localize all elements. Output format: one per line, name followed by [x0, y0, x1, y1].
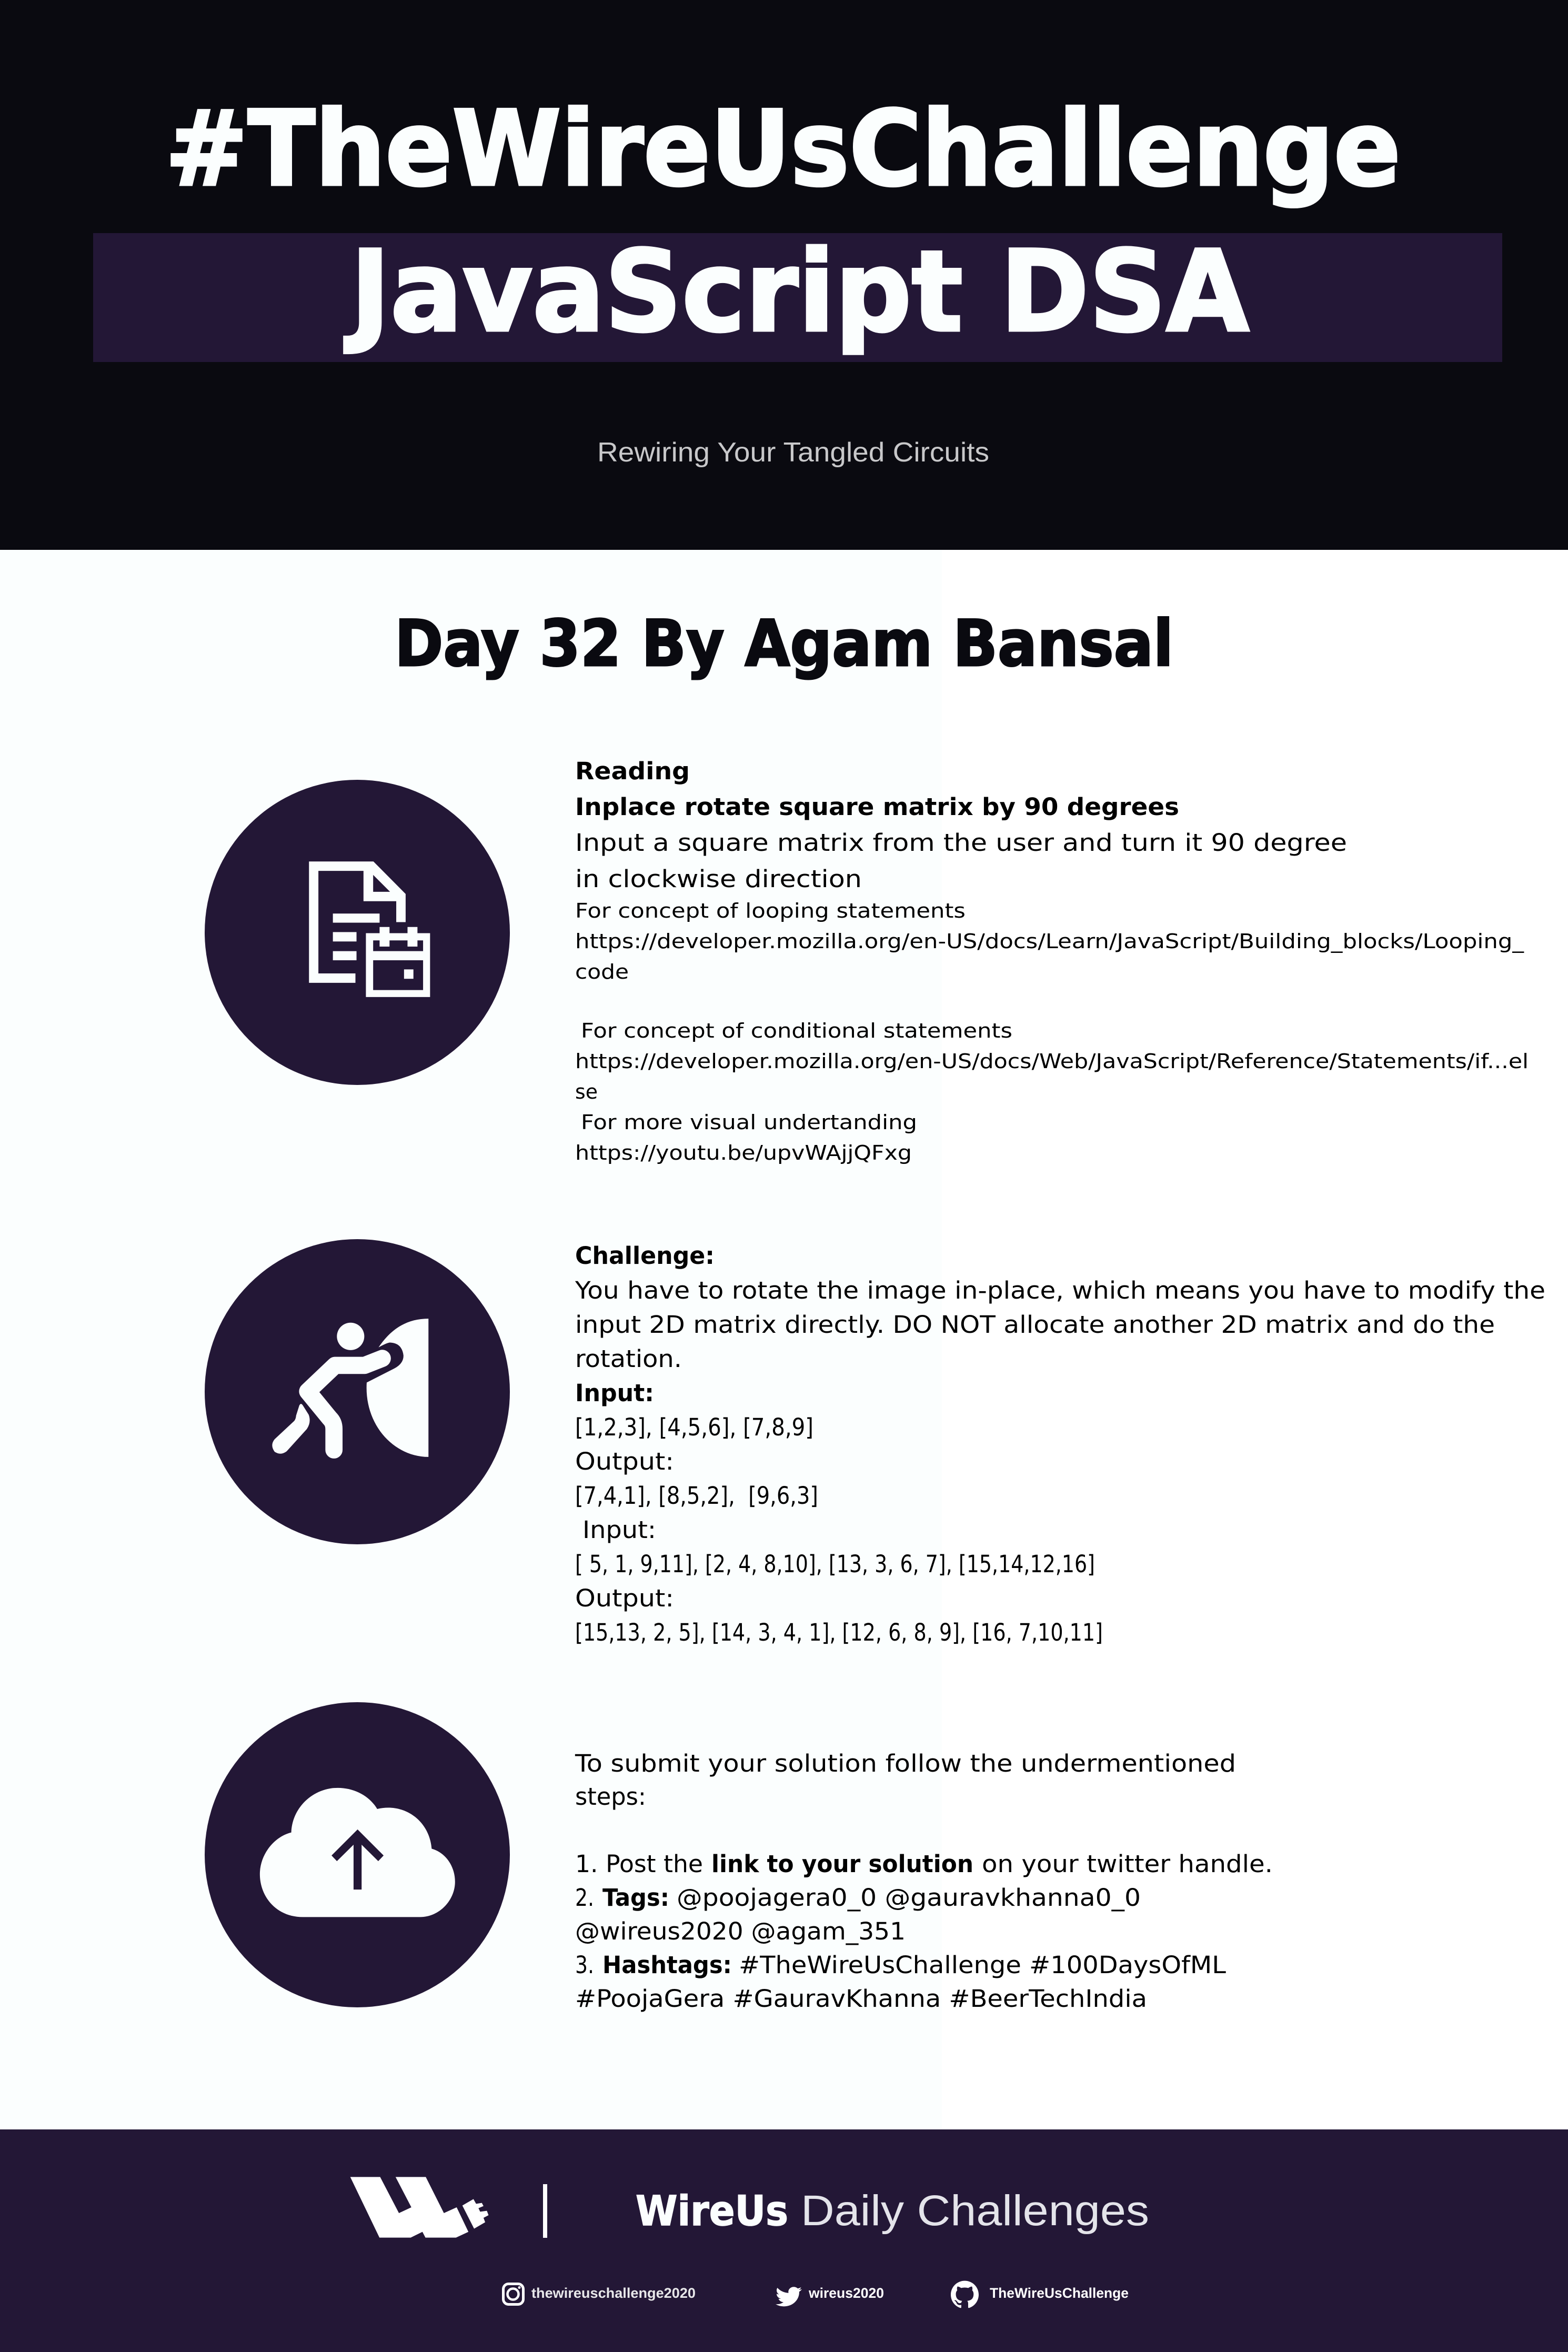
- text block: reading: [575, 757, 1529, 1165]
- text block: challenge: [575, 1242, 1545, 1646]
- icon: person pushing boulder: [205, 1239, 510, 1544]
- text block: challenge: Input:: [575, 1379, 654, 1407]
- text block: challenge: input 2D matrix directly. DO NOT allocate another 2D matrix and do the: [575, 1311, 1495, 1339]
- text block: submission steps: Tags:: [602, 1884, 669, 1912]
- text block: challenge: Challenge:: [575, 1242, 715, 1270]
- text block: reading: Inplace rotate square matrix by 90 degrees: [575, 793, 1179, 821]
- title: #TheWireUsChallenge: #TheWireUsChallenge: [165, 89, 1401, 209]
- text block: submission steps: #TheWireUsChallenge #100DaysOfML: [739, 1951, 1226, 1979]
- text block: challenge: [7,4,1], [8,5,2], [9,6,3]: [575, 1482, 818, 1510]
- icon: document with calendar: [205, 780, 510, 1085]
- text block: reading: se: [575, 1080, 598, 1104]
- text block: submission steps: @wireus2020 @agam_351: [575, 1917, 906, 1945]
- text block: submission steps: on your twitter handle.: [982, 1850, 1273, 1878]
- text block: submission steps: [575, 1750, 1273, 2013]
- icon: cloud upload: [205, 1702, 510, 2007]
- text block: submission steps: 2.: [575, 1884, 594, 1912]
- text block: reading: https://youtu.be/upvWAjjQFxg: [575, 1141, 912, 1165]
- text block: reading: in clockwise direction: [575, 865, 862, 893]
- text block: submission steps: @poojagera0_0 @gauravkhanna0_0: [677, 1884, 1141, 1912]
- twitter handle: wireus2020: [808, 2285, 884, 2301]
- text block: reading: For concept of conditional statements: [581, 1019, 1012, 1043]
- brand name: WireUs: [636, 2188, 788, 2235]
- header panel: [0, 0, 1568, 550]
- text block: submission steps: 1. Post the: [575, 1850, 703, 1878]
- text block: reading: https://developer.mozilla.org/en-US/docs/Web/JavaScript/Reference/Statements/if...el: [575, 1050, 1529, 1073]
- text block: challenge: [1,2,3], [4,5,6], [7,8,9]: [575, 1413, 813, 1441]
- icon: instagram: [503, 2284, 523, 2305]
- text block: challenge: Input:: [582, 1516, 656, 1544]
- text block: submission steps: 3.: [575, 1951, 594, 1979]
- text block: reading: code: [575, 960, 629, 984]
- text block: challenge: [ 5, 1, 9,11], [2, 4, 8,10], [13, 3, 6, 7], [15,14,12,16]: [575, 1550, 1095, 1578]
- text block: reading: For more visual undertanding: [581, 1111, 917, 1134]
- text block: challenge: You have to rotate the image in-place, which means you have to modify the: [575, 1276, 1545, 1304]
- text block: submission steps: Hashtags:: [602, 1951, 732, 1979]
- subtitle: JavaScript DSA: JavaScript DSA: [345, 227, 1249, 357]
- text block: submission steps: To submit your solution follow the undermentioned: [575, 1750, 1236, 1777]
- tagline: Rewiring Your Tangled Circuits: [597, 437, 989, 468]
- text block: challenge: Output:: [575, 1584, 674, 1612]
- instagram handle: thewireuschallenge2020: [531, 2285, 696, 2301]
- github handle: TheWireUsChallenge: [990, 2285, 1129, 2301]
- text block: challenge: [15,13, 2, 5], [14, 3, 4, 1], [12, 6, 8, 9], [16, 7,10,11]: [575, 1619, 1103, 1646]
- text block: reading: For concept of looping statements: [575, 899, 966, 923]
- text block: submission steps: steps:: [575, 1783, 646, 1811]
- heading: day and author: Day 32 By Agam Bansal: [395, 607, 1173, 681]
- text block: reading: https://developer.mozilla.org/en-US/docs/Learn/JavaScript/Building_blocks/Looping_: [575, 930, 1524, 953]
- icon: twitter: [776, 2287, 802, 2306]
- text block: challenge: rotation.: [575, 1345, 682, 1373]
- icon: WireUs logo: [350, 2177, 488, 2238]
- text block: submission steps: #PoojaGera #GauravKhanna #BeerTechIndia: [575, 1985, 1147, 2013]
- icon: github: [951, 2281, 979, 2308]
- divider: [543, 2184, 547, 2238]
- subtitle band: [93, 233, 1502, 362]
- text block: reading: Reading: [575, 757, 690, 785]
- text block: challenge: Output:: [575, 1448, 674, 1475]
- text block: reading: Input a square matrix from the user and turn it 90 degree: [575, 829, 1347, 857]
- brand name: Daily Challenges: [801, 2187, 1149, 2235]
- text block: submission steps: link to your solution: [711, 1850, 973, 1878]
- footer panel: [0, 2129, 1568, 2352]
- brand name: [636, 2187, 1149, 2235]
